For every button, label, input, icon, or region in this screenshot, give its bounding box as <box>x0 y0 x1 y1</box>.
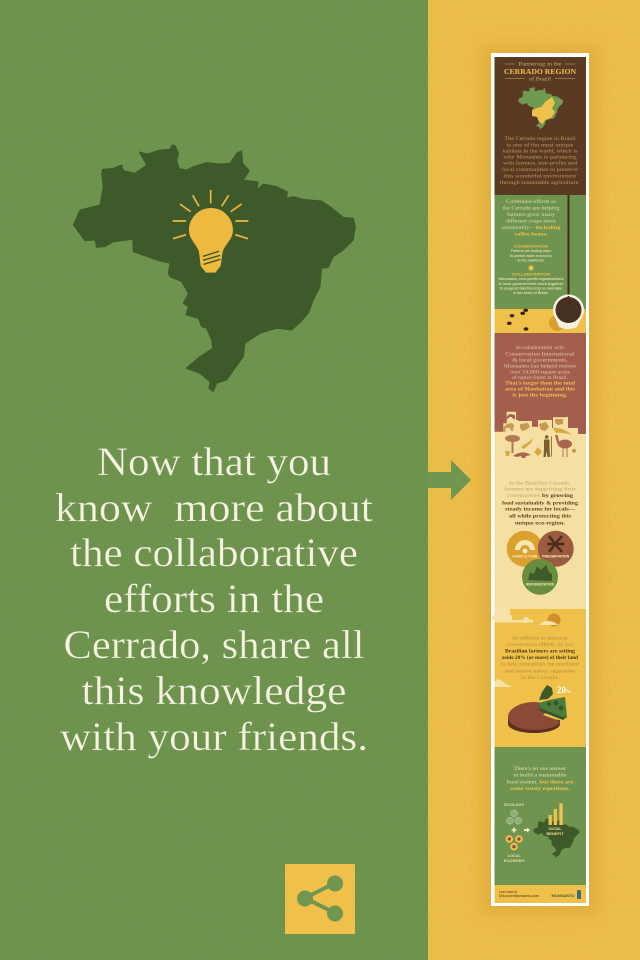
text: reforestation: area of Manhattan and this <box>505 386 576 392</box>
text: community <box>502 480 578 526</box>
icon: small arrow <box>524 828 530 832</box>
text: coffee intro <box>502 198 561 238</box>
label: local economy: LOCAL <box>508 854 521 858</box>
text: reforestation: Monsanto has helped restore <box>504 363 577 369</box>
illustration: clouds <box>492 607 558 687</box>
text: coffee intro: coffee beans. <box>514 232 548 238</box>
text: reforestation: of native forest in Brazil. <box>512 374 569 381</box>
panel: green equations <box>494 747 586 885</box>
bar chart: social benefit <box>548 803 563 825</box>
text: conservation: CONSERVATION <box>514 244 549 248</box>
icon: local economy coins <box>506 835 523 850</box>
text: community: steady income for locals— <box>505 507 575 513</box>
headline text: the collaborative <box>70 530 358 575</box>
text: community: In the Brazilian Cerrado, <box>509 480 572 486</box>
panel: brown intro <box>494 57 586 193</box>
text: set-aside: In addition to national <box>512 635 568 641</box>
label: ecology: ECOLOGY <box>504 803 525 807</box>
text: reforestation <box>504 345 577 399</box>
text: footer link: Learn more at <box>499 890 518 894</box>
text: conservation: Farmers are finding ways <box>511 249 551 253</box>
heading: of Brazil: of Brazil <box>529 76 551 82</box>
headline text: efforts in the <box>104 576 324 621</box>
venn: reforestation <box>522 559 558 595</box>
text: coffee intro: the Cerrado are helping <box>502 206 560 212</box>
panel: yellow background <box>428 0 640 960</box>
text: reforestation: over 24,000 square acres <box>510 369 570 375</box>
map: social benefit <box>533 818 579 858</box>
text: community: food sustainably & providing <box>502 500 578 506</box>
text: set-aside: conservation efforts, by law <box>506 641 575 648</box>
panel: footer <box>494 885 586 903</box>
background edge glow around thumbnail <box>482 46 598 914</box>
lizard <box>521 438 533 449</box>
text: set-aside: to help reestablish the rainforest <box>501 661 579 668</box>
text: coffee intro: different crops more <box>506 218 557 224</box>
illustration: sun <box>548 614 560 626</box>
label: social benefit: BENEFIT <box>546 832 564 836</box>
jaguar on building <box>507 414 515 419</box>
text: community: unique eco-region. <box>515 520 566 526</box>
anteater <box>513 452 531 458</box>
panel: cream base <box>494 437 586 609</box>
text: set-aside: and restore native vegetation <box>505 668 575 674</box>
text: intro: The Cerrado region in Brazil <box>504 136 576 142</box>
text: intro: habitats in the world, which is <box>502 148 578 154</box>
headline text: this knowledge <box>82 668 346 713</box>
logo: Monsanto: MONSANTO <box>552 894 575 898</box>
text: reforestation: is just the beginning. <box>512 393 568 399</box>
label: social benefit: SOCIAL <box>548 827 562 831</box>
text: set-aside <box>501 635 579 681</box>
text: collaboration: to support biodiversity to maintain <box>500 286 563 290</box>
icon: plus <box>512 828 516 832</box>
heading: partnering: Partnering in the <box>518 62 562 68</box>
headline text: Now that you <box>97 439 331 484</box>
map silhouette <box>73 145 355 392</box>
panel: coffee green <box>494 192 586 333</box>
text: collaboration: & local governments work together <box>498 282 564 286</box>
map: Brazil with light bulb <box>73 145 355 392</box>
text: intro: is one of the most unique <box>506 141 574 148</box>
pie chart: 20 percent <box>508 685 567 733</box>
label: local economy <box>504 854 526 863</box>
text: collaboration: a true taste of Brazil. <box>514 291 549 295</box>
illustration: wildlife silhouettes <box>503 414 576 458</box>
text: set-aside: Brazilian farmers are setting <box>505 649 575 655</box>
venn: preservation: PRESERVATION <box>542 554 570 558</box>
text: set-aside: aside 20% (or more) of their land <box>502 654 579 661</box>
venn: preservation <box>538 531 574 567</box>
panel: green background <box>0 0 428 960</box>
arrow <box>428 460 471 500</box>
text: intro: local communities to preserve <box>502 167 579 173</box>
map: Cerrado region <box>518 87 563 130</box>
text: conservation <box>510 244 552 262</box>
building animals <box>503 423 514 432</box>
text: intro: this wonderful environment <box>504 172 577 180</box>
venn: reforestation: REFORESTATION <box>526 583 555 587</box>
text: reforestation: That's larger than the total <box>505 381 575 387</box>
text: coffee intro: sustainably— including <box>502 225 561 231</box>
text: collaboration: Monsanto, non-profit organizations <box>498 277 564 281</box>
text: reforestation: In collaboration with <box>516 345 564 351</box>
text: intro: with farmers, non-profits and <box>503 160 577 167</box>
text: footer link <box>499 890 539 898</box>
venn: agriculture <box>507 531 543 567</box>
coffee drip <box>568 192 570 312</box>
label: social benefit <box>546 827 564 836</box>
text: collaboration <box>498 272 564 295</box>
text: community: farmers are supporting their <box>504 486 576 493</box>
text: conservation: in the rainforest. <box>518 258 545 262</box>
panel: red reforestation <box>494 333 586 609</box>
headline text: Cerrado, share all <box>64 622 364 667</box>
headline text: with your friends. <box>60 714 368 759</box>
text: reforestation: & local governments, <box>512 358 568 364</box>
text: community: all while protecting this <box>509 514 572 520</box>
text: equations: to build a sustainable <box>514 773 567 779</box>
text: collaboration: COLLABORATION <box>512 272 551 276</box>
text: equations: There's no one answer <box>514 766 566 772</box>
emu <box>555 435 572 457</box>
text: coffee intro: Combined efforts in <box>506 198 556 205</box>
text: conservation: to protect water resources <box>510 254 552 258</box>
text: equations: some trusty equations. <box>510 786 571 792</box>
text: equations <box>506 766 574 792</box>
icon: share button <box>285 864 355 934</box>
text: reforestation: Conservation International <box>506 351 575 357</box>
leaves and small icons <box>534 447 542 456</box>
headline text <box>55 439 373 759</box>
icon: ecology leaves <box>507 810 522 824</box>
icon: coffee cup <box>549 294 584 331</box>
tree <box>505 435 520 453</box>
label: local economy: ECONOMY <box>504 859 526 863</box>
text: coffee intro: farmers grow many <box>507 211 555 218</box>
panel: yellow set-aside <box>492 607 586 747</box>
text: intro <box>500 136 581 186</box>
text: set-aside: in the Cerrado. <box>521 675 560 681</box>
text: equations: food system, but there are <box>506 778 574 785</box>
icon: light bulb <box>173 190 248 273</box>
text: community: communities by growing <box>507 493 573 499</box>
headline text: know more about <box>55 485 373 530</box>
icon: coffee beans <box>507 309 528 331</box>
infographic thumbnail <box>491 53 589 906</box>
text: intro: why Monsanto is partnering <box>504 154 577 160</box>
text: footer link: DiscoverMonsanto.com <box>499 894 539 898</box>
venn: agriculture: AGRICULTURE <box>512 554 537 558</box>
heading: Cerrado region: CERRADO REGION <box>504 67 577 76</box>
icon: plus badge <box>528 266 534 270</box>
thumbnail white frame <box>491 53 589 906</box>
label: 20 percent: 20% <box>557 685 571 695</box>
farmer <box>544 435 552 457</box>
illustration: city skyline fading to cream <box>494 412 586 440</box>
text: intro: through sustainable agriculture. <box>500 180 581 186</box>
